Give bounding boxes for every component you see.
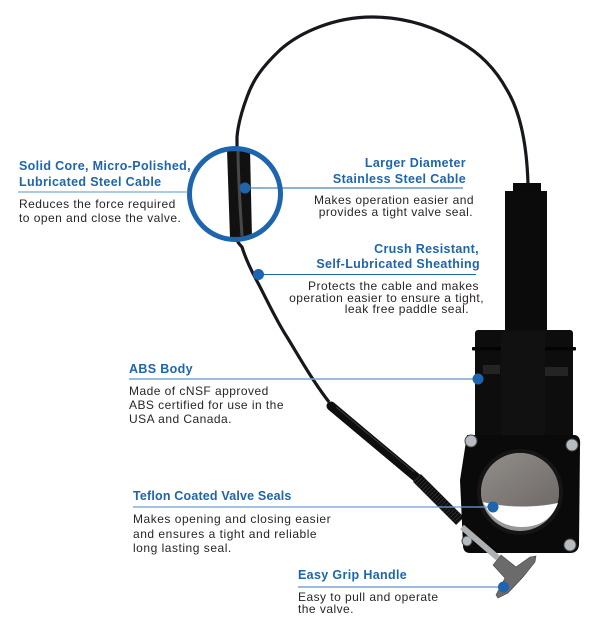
valve stem housing xyxy=(505,183,547,333)
callout: larger diameter cable: Larger Diameter xyxy=(365,156,466,170)
callout: solid core cable: Reduces the force required xyxy=(19,197,176,211)
callout: ABS body: Made of cNSF approved xyxy=(129,384,269,398)
callout: solid core cable: to open and close the valve. xyxy=(19,211,181,225)
callout: ABS body: USA and Canada. xyxy=(129,412,232,426)
callout: solid core cable xyxy=(18,159,191,225)
illustration: gate valve with cable xyxy=(237,17,580,598)
callout: crush resistant sheathing: Self-Lubricated Sheathing xyxy=(316,257,480,271)
callout: teflon seals: Teflon Coated Valve Seals xyxy=(133,489,292,503)
cable sheath and spring xyxy=(331,406,460,521)
callout: crush resistant sheathing: operation easier to ensure a tight, xyxy=(289,291,484,305)
callout: grip handle xyxy=(298,568,509,616)
callout: teflon seals: long lasting seal. xyxy=(133,541,232,555)
pull rod xyxy=(462,527,498,558)
callout: grip handle: the valve. xyxy=(298,602,354,616)
callout: solid core cable: Lubricated Steel Cable xyxy=(19,175,161,189)
valve opening xyxy=(477,449,563,535)
cable xyxy=(237,17,528,402)
callout: larger diameter cable: Makes operation easier and xyxy=(314,193,474,207)
callout: ABS body xyxy=(129,362,484,426)
magnifier circle xyxy=(190,148,280,240)
callout: crush resistant sheathing: leak free paddle seal. xyxy=(345,302,469,316)
callout: solid core cable: Solid Core, Micro-Polished, xyxy=(19,159,191,173)
bolts xyxy=(462,435,578,551)
callout: larger diameter cable: provides a tight valve seal. xyxy=(319,205,473,219)
valve upper body xyxy=(472,330,576,438)
callout: crush resistant sheathing: Protects the cable and makes xyxy=(308,279,479,293)
callout: crush resistant sheathing: Crush Resistant, xyxy=(374,242,479,256)
callout: teflon seals: Makes opening and closing easier xyxy=(133,512,331,526)
callout: grip handle: Easy Grip Handle xyxy=(298,568,407,582)
valve lower body xyxy=(460,435,580,553)
callout: ABS body: ABS Body xyxy=(129,362,193,376)
callout: teflon seals xyxy=(133,489,498,555)
callout: ABS body: ABS certified for use in the xyxy=(129,398,284,412)
handle xyxy=(493,555,536,598)
callout: crush resistant sheathing xyxy=(253,242,484,316)
callout: teflon seals: and ensures a tight and reliable xyxy=(133,527,317,541)
callout: larger diameter cable xyxy=(240,156,474,219)
callout: larger diameter cable: Stainless Steel Cable xyxy=(333,172,466,186)
callout: grip handle: Easy to pull and operate xyxy=(298,590,438,604)
